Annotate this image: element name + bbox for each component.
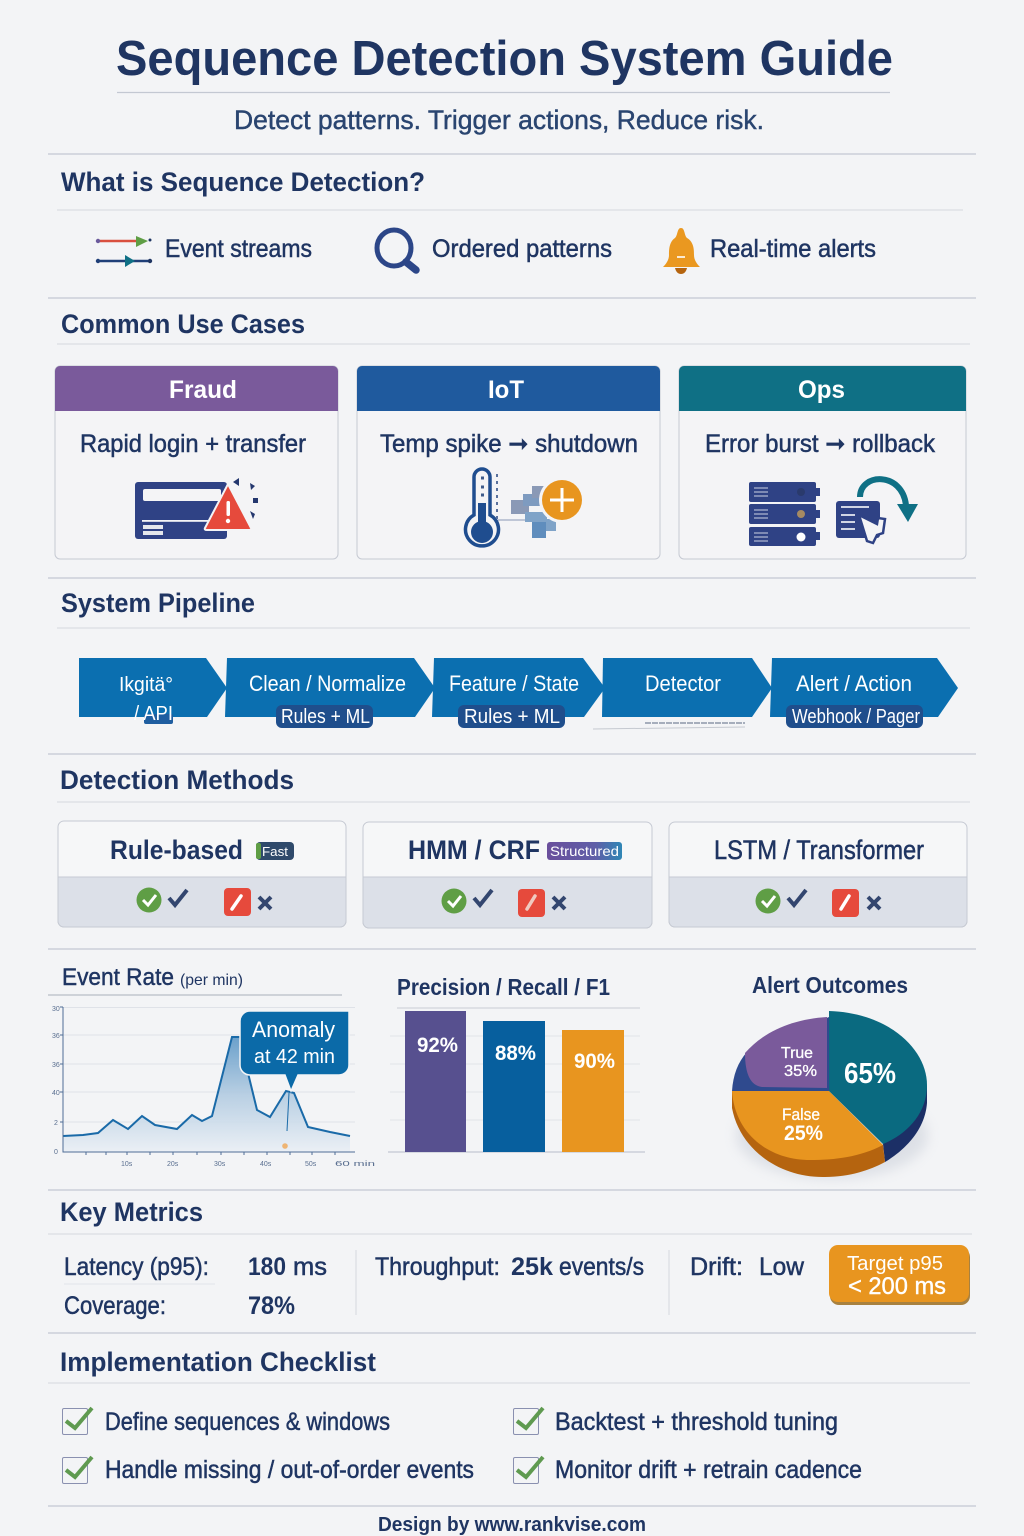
pie label: false — [782, 1105, 823, 1145]
metric: throughput: 25k — [511, 1253, 553, 1281]
pipeline step: feature — [432, 658, 605, 728]
label: event streams: Event streams — [165, 235, 312, 263]
icon: event streams — [96, 236, 152, 267]
icon: con cross — [224, 888, 271, 916]
pipeline step: detector — [593, 658, 772, 729]
chart: precision recall f1 — [388, 974, 645, 1152]
chart heading: event rate: Event Rate — [62, 964, 174, 991]
ops description: Error burst ➞ rollback — [705, 430, 935, 458]
bar: precision 92% — [405, 1011, 466, 1152]
metric: throughput: Throughput: — [375, 1253, 500, 1281]
bar: f1 90%: 90% — [574, 1050, 615, 1073]
metric: drift: Drift: — [690, 1253, 743, 1281]
footer credit: Design by www.rankvise.com — [378, 1514, 646, 1536]
bar: recall 88% — [483, 1021, 545, 1152]
pipeline step: feature: Feature / State — [449, 671, 579, 696]
label: real-time alerts: Real-time alerts — [710, 235, 876, 263]
heading: key metrics: Key Metrics — [60, 1197, 203, 1227]
panel: lstm / transformer: LSTM / Transformer — [714, 835, 924, 865]
checklist item: monitor drift: Monitor drift + retrain cadence — [555, 1456, 862, 1484]
checklist item: handle missing: Handle missing / out-of-order events — [105, 1456, 474, 1484]
bar: f1 90% — [562, 1030, 624, 1152]
pipeline step: clean — [225, 658, 435, 728]
metric: latency: 180 — [248, 1253, 286, 1281]
pipeline step: ingest: Ikgitä° — [119, 674, 173, 696]
metric: coverage: 78% — [248, 1292, 295, 1320]
metric: coverage: Coverage: — [64, 1292, 166, 1320]
pie label: 65%: 65% — [844, 1058, 896, 1090]
metric: throughput: events/s — [559, 1253, 644, 1281]
panel: ops — [679, 366, 966, 559]
chart: alert outcomes pie — [732, 972, 928, 1179]
chart: event rate: 36 — [52, 1062, 60, 1069]
panel: rule-based — [58, 821, 346, 927]
icon: credit card alert — [135, 478, 258, 539]
icon: con cross — [518, 889, 565, 917]
section: detection methods — [57, 765, 970, 928]
checklist item: backtest: Backtest + threshold tuning — [555, 1408, 838, 1436]
chart: event rate — [48, 964, 375, 1168]
metric: latency: Latency (p95): — [64, 1253, 209, 1281]
badge: structured: Structured — [550, 843, 619, 859]
pipeline step: alert: Alert / Action — [796, 671, 912, 696]
chart: event rate: 30s — [214, 1161, 226, 1168]
title: Sequence Detection System Guide — [116, 32, 893, 86]
pipeline step: detector: Detector — [645, 671, 721, 696]
callout: anomaly — [240, 1011, 349, 1091]
icon: pro check — [136, 888, 187, 912]
pie label: true — [781, 1045, 817, 1080]
heading: what is sequence detection: What is Sequence Detection? — [61, 167, 425, 197]
callout: target p95 — [829, 1245, 970, 1305]
chart: event rate: 36 — [52, 1033, 60, 1040]
iot header label: IoT — [488, 376, 524, 404]
pipeline step: feature: Rules + ML — [464, 706, 560, 728]
badge: fast: Fast — [262, 844, 288, 859]
chart: event rate: 20s — [167, 1161, 179, 1168]
chart: event rate: 0 — [54, 1149, 58, 1156]
badge: fast — [256, 842, 294, 860]
pipeline step: alert: Webhook / Pager — [792, 706, 920, 728]
panel: lstm / transformer — [669, 822, 967, 927]
iot description: Temp spike ➞ shutdown — [380, 430, 638, 458]
bar: precision 92%: 92% — [417, 1034, 458, 1057]
icon: con cross — [832, 889, 880, 917]
metric: latency — [64, 1253, 327, 1281]
chart: event rate: 50s — [305, 1161, 317, 1168]
section: common use cases — [55, 309, 970, 559]
section: implementation checklist — [48, 1347, 970, 1484]
section: what is sequence detection — [57, 167, 963, 274]
pie label: false: False — [782, 1105, 820, 1124]
icon: servers and rollback — [749, 479, 918, 546]
chart heading: precision recall f1: Precision / Recall / F1 — [397, 974, 610, 1000]
bar: recall 88%: 88% — [495, 1042, 536, 1065]
checklist item: define sequences: Define sequences & windows — [105, 1408, 390, 1436]
chart heading: alert outcomes: Alert Outcomes — [752, 972, 908, 998]
icon: magnifier — [377, 230, 416, 270]
chart unit: per min: (per min) — [180, 972, 243, 989]
metric: throughput — [375, 1253, 644, 1281]
icon: bell — [663, 228, 700, 274]
heading: system pipeline: System Pipeline — [61, 588, 255, 618]
section: system pipeline — [57, 588, 970, 729]
section: key metrics — [48, 1197, 972, 1320]
chart: event rate: 2 — [54, 1120, 58, 1127]
heading: implementation checklist: Implementation Checklist — [60, 1347, 376, 1377]
chart: event rate: 40s — [260, 1161, 272, 1168]
panel: hmm / crf — [363, 822, 652, 928]
pie label: true: True — [781, 1045, 813, 1062]
pipeline step: ingest: / API — [134, 703, 173, 725]
metric: drift — [690, 1253, 805, 1281]
label: ordered patterns: Ordered patterns — [432, 235, 612, 263]
subtitle: Detect patterns. Trigger actions, Reduce risk. — [234, 105, 764, 135]
panel: hmm / crf: HMM / CRF — [408, 835, 540, 865]
pie label: true: 35% — [784, 1063, 817, 1080]
panel: rule-based: Rule-based — [110, 835, 243, 865]
metric: latency: ms — [293, 1253, 327, 1281]
pipeline step: alert — [770, 658, 958, 728]
panel: iot — [357, 366, 660, 559]
icon: thermometer and gear — [466, 469, 585, 546]
metric: drift: Low — [759, 1253, 805, 1281]
chart: event rate: 30 — [52, 1006, 60, 1013]
ops header label: Ops — [798, 376, 845, 404]
pipeline step: clean: Rules + ML — [281, 706, 370, 728]
metric: coverage — [64, 1292, 295, 1320]
callout: anomaly: at 42 min — [254, 1046, 335, 1068]
fraud description: Rapid login + transfer — [80, 430, 306, 458]
panel: fraud — [55, 366, 338, 559]
icon: pro check — [756, 888, 806, 914]
heading: detection methods: Detection Methods — [60, 765, 294, 795]
chart: event rate: 10s — [121, 1161, 133, 1168]
chart: event rate: 60 min — [335, 1161, 375, 1168]
pipeline step: ingest — [79, 658, 227, 725]
icon: pro check — [442, 888, 492, 914]
callout: target p95: Target p95 — [847, 1253, 943, 1275]
pipeline step: clean: Clean / Normalize — [249, 671, 406, 696]
callout: anomaly: Anomaly — [252, 1017, 335, 1042]
fraud header label: Fraud — [169, 376, 237, 404]
callout: target p95: < 200 ms — [848, 1273, 946, 1300]
pie label: false: 25% — [784, 1122, 823, 1145]
heading: common use cases: Common Use Cases — [61, 309, 305, 339]
chart: event rate: 40 — [52, 1090, 60, 1097]
